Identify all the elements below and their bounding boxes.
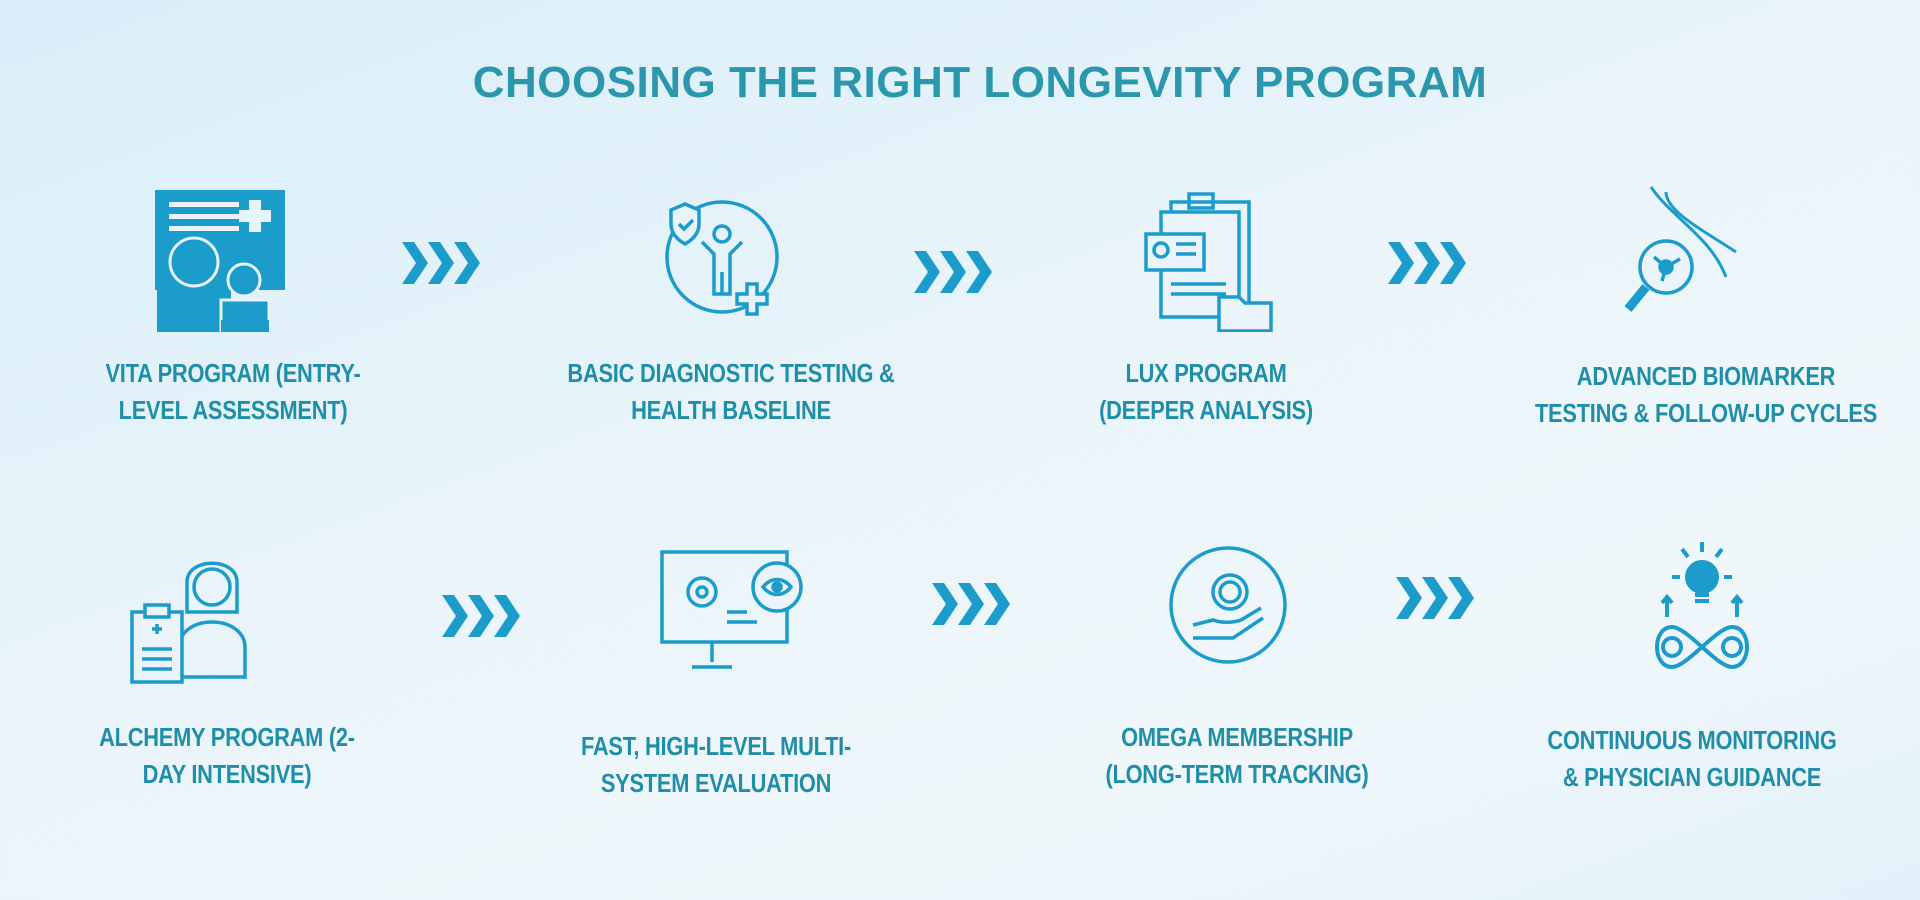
icon: clipboard files [1144,192,1273,332]
label 1: LEVEL ASSESSMENT) [119,395,347,425]
label 3 [1099,358,1313,425]
arrow 7 [1396,577,1474,619]
label 5: ALCHEMY PROGRAM (2- [99,722,355,752]
icon: hand clock [1169,546,1287,664]
label 4 [1535,361,1877,428]
label 5 [99,722,355,789]
icon: monitor gear eye [660,550,803,669]
icon: child protection [665,200,779,316]
label 8: CONTINUOUS MONITORING [1547,725,1837,755]
label 6 [581,731,851,798]
icon: female doctor [130,562,247,684]
icon: DNA magnifier [1624,186,1737,312]
title: CHOOSING THE RIGHT LONGEVITY PROGRAM [473,58,1487,107]
label 8: & PHYSICIAN GUIDANCE [1563,762,1821,792]
label 4: TESTING & FOLLOW-UP CYCLES [1535,398,1877,428]
label 1: VITA PROGRAM (ENTRY- [105,358,361,388]
icon: bulb infinity gears [1655,542,1749,669]
arrow 6 [932,583,1010,625]
label 3: LUX PROGRAM [1125,358,1287,388]
label 2: BASIC DIAGNOSTIC TESTING & [567,358,895,388]
arrow 5 [442,595,520,637]
label 6: SYSTEM EVALUATION [601,768,831,798]
label 7: (LONG-TERM TRACKING) [1105,759,1369,789]
label 6: FAST, HIGH-LEVEL MULTI- [581,731,851,761]
label 1 [105,358,361,425]
label 7 [1105,722,1369,789]
label 4: ADVANCED BIOMARKER [1577,361,1835,391]
arrow 3 [1388,242,1466,284]
label 7: OMEGA MEMBERSHIP [1121,722,1353,752]
label 3: (DEEPER ANALYSIS) [1099,395,1313,425]
label 8 [1547,725,1837,792]
arrow 2 [914,251,992,293]
arrow 1 [402,242,480,284]
label 5: DAY INTENSIVE) [143,759,311,789]
icon: doctor and patient [155,190,285,332]
label 2: HEALTH BASELINE [631,395,831,425]
label 2 [567,358,895,425]
